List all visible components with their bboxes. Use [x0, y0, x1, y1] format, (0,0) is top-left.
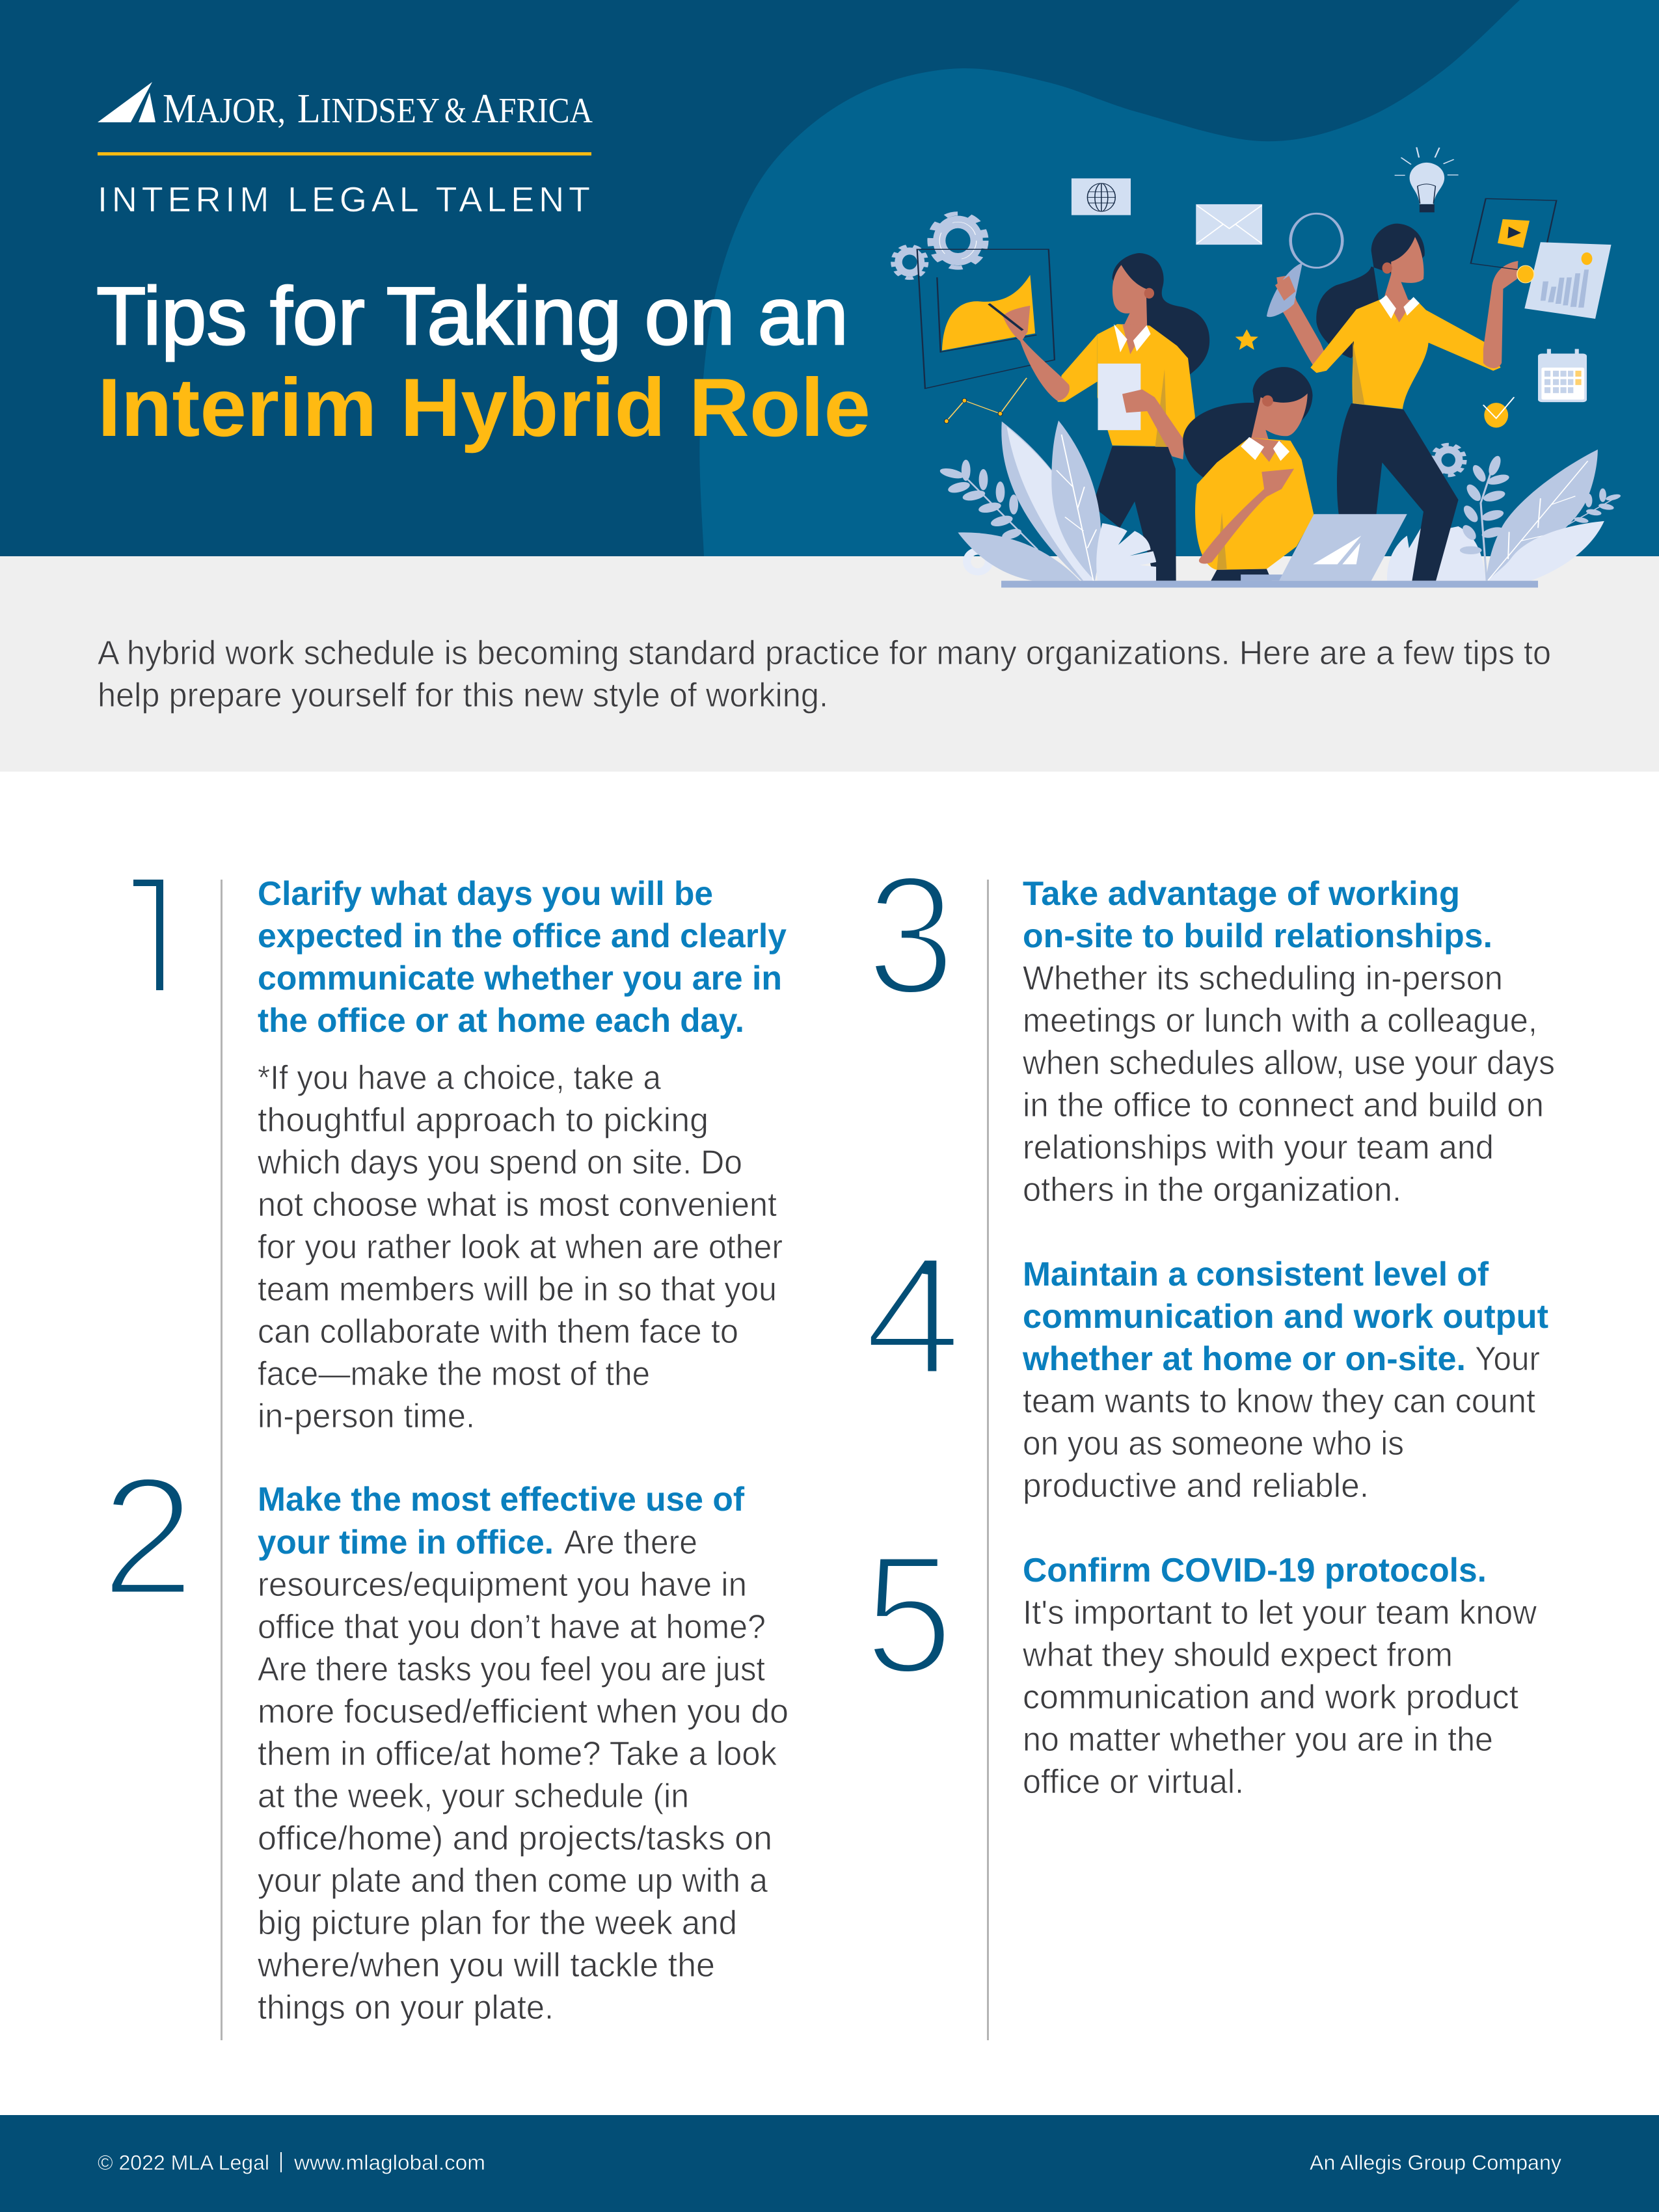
- divider: right column: [987, 880, 989, 2040]
- footer website: www.mlaglobal.com: [293, 2151, 485, 2174]
- tip 1 body: *If you have a choice, take a: [258, 1059, 661, 1097]
- footer separator: [280, 2152, 282, 2172]
- intro text: A hybrid work schedule is becoming standard practice for many organizations. Here are a few tips to: [98, 634, 1551, 672]
- title: Interim Hybrid Role: [98, 361, 870, 453]
- tip 3: [1022, 875, 1555, 1209]
- logo wordmark: AFRICA: [472, 85, 593, 131]
- figure: woman center: [1183, 367, 1314, 581]
- tip 3: meetings or lunch with a colleague,: [1023, 1002, 1537, 1040]
- tip 1 body: face—make the most of the: [258, 1355, 650, 1393]
- tip 2: more focused/efficient when you do: [258, 1693, 789, 1731]
- tip 4: [1022, 1256, 1548, 1505]
- figure: woman left: [989, 253, 1209, 581]
- gray intro band: [0, 556, 1659, 772]
- subtitle: interim legal talent: INTERIM LEGAL TALENT: [98, 180, 590, 219]
- tip 3: on-site to build relationships.: [1023, 917, 1492, 955]
- tip 1 body: for you rather look at when are other: [258, 1228, 783, 1266]
- tip 2: your time in office.: [258, 1524, 554, 1561]
- tip 1 body: thoughtful approach to picking: [258, 1101, 708, 1139]
- tip 2: things on your plate.: [258, 1989, 554, 2027]
- tip 4: whether at home or on-site.: [1022, 1340, 1466, 1378]
- number 3: 3: [867, 841, 955, 1030]
- tip 5: office or virtual.: [1023, 1763, 1244, 1801]
- logo wordmark: [163, 85, 593, 131]
- footer copyright: © 2022 MLA Legal: [98, 2151, 269, 2174]
- tip 5: It's important to let your team know: [1023, 1594, 1537, 1632]
- tip 2: [257, 1481, 789, 2027]
- footer: [0, 2115, 1659, 2212]
- intro text: [98, 634, 1551, 714]
- plants: right cluster: [1387, 450, 1622, 581]
- footer company: An Allegis Group Company: [1310, 2151, 1561, 2174]
- tip 5: [1022, 1552, 1537, 1801]
- tip 1 heading: the office or at home each day.: [258, 1002, 744, 1040]
- tip 2: them in office/at home? Take a look: [258, 1735, 777, 1773]
- illustration: three women working: [893, 147, 1622, 587]
- tip 1 body: in-person time.: [258, 1397, 475, 1435]
- icon: gears: [893, 213, 986, 278]
- tip 4: communication and work output: [1023, 1298, 1548, 1336]
- logo wordmark: &: [444, 90, 466, 130]
- number 4: 4: [864, 1222, 962, 1410]
- icon: globe card: [1072, 178, 1131, 215]
- figure: woman right: [1267, 213, 1518, 581]
- tip 3: when schedules allow, use your days: [1022, 1044, 1555, 1082]
- header banner: [0, 0, 1659, 556]
- tip 1 body: team members will be in so that you: [258, 1271, 777, 1308]
- tip 2: office/home) and projects/tasks on: [258, 1820, 772, 1857]
- icon: small gear right: [1433, 444, 1464, 476]
- logo wordmark: LINDSEY: [297, 85, 440, 131]
- tip 1 heading: Clarify what days you will be: [258, 875, 713, 913]
- number 2: 2: [101, 1442, 195, 1631]
- tip 3: others in the organization.: [1023, 1171, 1401, 1209]
- icon: chart frame: [917, 249, 1055, 388]
- tip 1 heading: expected in the office and clearly: [258, 917, 787, 955]
- tip 5: no matter whether you are in the: [1023, 1721, 1493, 1759]
- tip 4: Your: [1475, 1340, 1540, 1378]
- tip 1 body: not choose what is most convenient: [258, 1186, 777, 1224]
- tip 1 body: [257, 1059, 783, 1435]
- tip 2: Make the most effective use of: [258, 1481, 745, 1518]
- tip 3: Take advantage of working: [1023, 875, 1460, 913]
- icon: financial report: [1517, 242, 1612, 319]
- tip 4: Maintain a consistent level of: [1023, 1256, 1489, 1293]
- tip 3: relationships with your team and: [1023, 1129, 1494, 1167]
- logo: Major, Lindsey & Africa: [98, 82, 593, 131]
- icon: envelope: [1196, 204, 1262, 245]
- tip 2: where/when you will tackle the: [257, 1947, 715, 1984]
- tip 5: Confirm COVID-19 protocols.: [1023, 1552, 1487, 1589]
- icon: star: [1235, 329, 1258, 350]
- plants: left cluster: [937, 420, 1156, 581]
- tip 4: team wants to know they can count: [1023, 1382, 1536, 1420]
- tip 4: on you as someone who is: [1023, 1425, 1404, 1463]
- tip 1 heading: communicate whether you are in: [258, 960, 782, 997]
- tip 1: [257, 875, 787, 1435]
- tip 1 body: can collaborate with them face to: [258, 1313, 738, 1351]
- icon: video frame: [1471, 198, 1556, 273]
- number 5: 5: [865, 1520, 953, 1709]
- number 1: 1: [111, 843, 205, 1032]
- icon: laptop: [1279, 514, 1407, 581]
- tip 5: what they should expect from: [1022, 1636, 1453, 1674]
- tip 2: resources/equipment you have in: [258, 1566, 747, 1604]
- tip 2: at the week, your schedule (in: [258, 1777, 689, 1815]
- tip 1 heading: [258, 875, 787, 1040]
- icon: calendar: [1538, 349, 1587, 402]
- tip 4: productive and reliable.: [1023, 1467, 1369, 1505]
- icon: check badge: [1483, 397, 1514, 427]
- tip 1 body: which days you spend on site. Do: [257, 1144, 742, 1181]
- intro text: help prepare yourself for this new style of working.: [98, 677, 828, 714]
- tip 2: your plate and then come up with a: [258, 1862, 768, 1900]
- icon: sail mark: [98, 82, 155, 122]
- tip 2: office that you don’t have at home?: [258, 1608, 766, 1646]
- divider: left column: [221, 880, 223, 2040]
- tip 3: Whether its scheduling in-person: [1023, 960, 1503, 997]
- title: Tips for Taking on an: [96, 270, 848, 362]
- yellow rule: [98, 152, 591, 155]
- tip 2: Are there: [564, 1524, 697, 1561]
- title: [96, 270, 870, 453]
- icon: light bulb: [1395, 147, 1459, 212]
- tip 2: big picture plan for the week and: [258, 1904, 737, 1942]
- tip 3: in the office to connect and build on: [1023, 1086, 1544, 1124]
- number 1: [133, 880, 163, 990]
- tip 2: Are there tasks you feel you are just: [258, 1651, 766, 1688]
- ground bar: [1001, 581, 1538, 587]
- icon: line chart: [944, 378, 1027, 424]
- tip 5: communication and work product: [1023, 1679, 1519, 1716]
- logo wordmark: MAJOR,: [163, 85, 286, 131]
